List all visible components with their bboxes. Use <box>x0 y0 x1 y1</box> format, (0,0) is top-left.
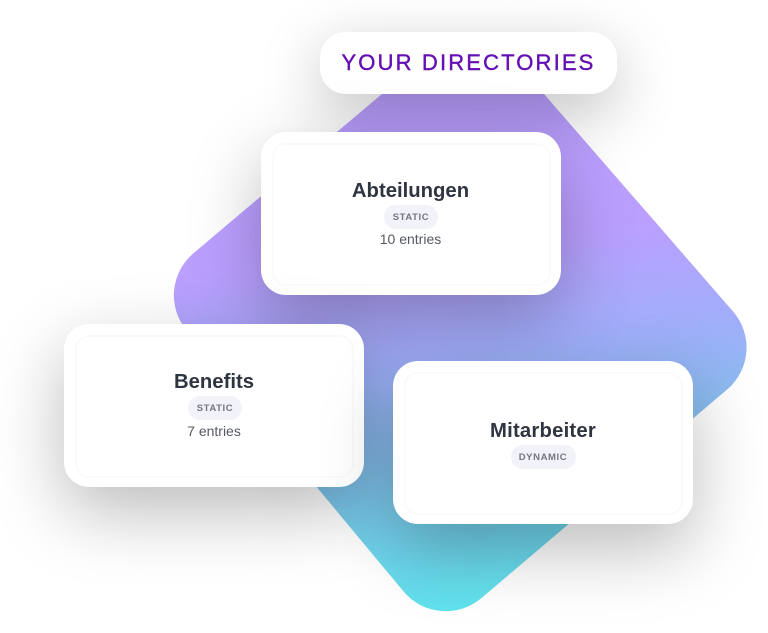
badge: static: STATIC <box>393 212 429 223</box>
card inner outline <box>75 334 354 478</box>
card title: Benefits <box>174 370 254 392</box>
card: Benefits <box>64 324 364 486</box>
badge: static <box>384 205 438 229</box>
entry count: 10 entries <box>380 231 441 247</box>
card: Abteilungen <box>260 132 560 295</box>
card inner outline <box>272 143 550 286</box>
badge: dynamic: DYNAMIC <box>519 452 567 463</box>
entry count: 7 entries <box>187 422 241 438</box>
card title: Mitarbeiter <box>490 420 596 442</box>
badge: static <box>188 396 242 420</box>
card: Mitarbeiter <box>393 360 693 524</box>
title text: YOUR DIRECTORIES <box>341 50 596 75</box>
title pill <box>320 32 617 94</box>
badge: static: STATIC <box>197 403 233 414</box>
card title: Abteilungen <box>352 180 469 202</box>
badge: dynamic <box>510 445 576 469</box>
card inner outline <box>404 372 683 514</box>
